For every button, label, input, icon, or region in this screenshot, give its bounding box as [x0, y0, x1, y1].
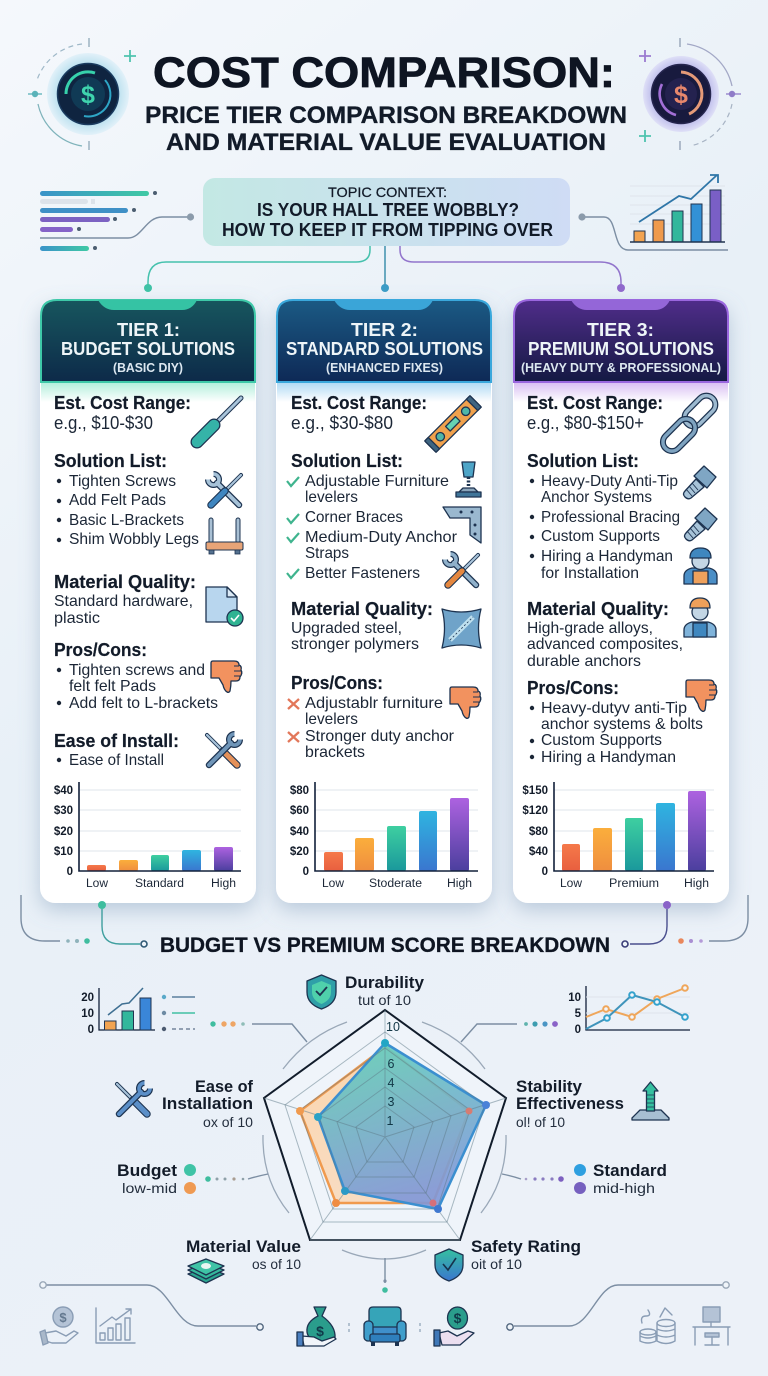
bar chart: tier 1 cost: $40	[54, 785, 73, 797]
pros and cons: Pros/Cons:	[54, 640, 147, 660]
icon: safety shield	[435, 1249, 463, 1281]
title: PRICE TIER COMPARISON BREAKDOWN	[145, 102, 627, 129]
solution list: Medium-Duty Anchor	[305, 529, 458, 546]
solution list: Better Fasteners	[305, 565, 420, 582]
icon: durability shield	[307, 975, 336, 1009]
mini bar chart with trend arrow	[578, 175, 728, 250]
legend: standard: mid-high	[593, 1180, 655, 1196]
line chart, top right: 0	[575, 1024, 581, 1036]
label: stability effectiveness: Effectiveness	[516, 1094, 624, 1113]
bar chart: tier 2 cost	[290, 782, 478, 890]
label: material value	[186, 1237, 301, 1272]
icon: corner brace	[443, 507, 481, 543]
icon: wrench and orange screwdriver	[207, 734, 240, 765]
est cost range: e.g., $80-$150+	[527, 413, 644, 433]
icon: tools	[117, 1083, 150, 1114]
pros and cons: levelers	[305, 711, 358, 728]
topic context box: IS YOUR HALL TREE WOBBLY?	[257, 199, 519, 220]
label: stability effectiveness	[516, 1077, 624, 1130]
tier 3 header: PREMIUM SOLUTIONS	[528, 338, 714, 359]
material quality: Material Quality:	[54, 572, 196, 592]
label: durability: tut of 10	[358, 992, 411, 1008]
bar chart: tier 2 cost: $20	[290, 846, 309, 858]
bar chart: tier 3 cost	[522, 782, 714, 890]
bar chart: tier 1 cost: 0	[67, 866, 73, 878]
material quality	[54, 572, 196, 627]
series: standard	[318, 1043, 486, 1209]
icon: money bag with hand: $	[316, 1323, 324, 1339]
icon: wrench and screwdriver	[445, 554, 478, 585]
pros and cons: Tighten screws and	[69, 662, 205, 679]
tier 1 header: BUDGET SOLUTIONS	[61, 338, 235, 359]
icon: left teal dollar medallion: $	[81, 81, 95, 109]
icon: right purple dollar medallion: $	[674, 81, 688, 109]
bar chart: tier 2 cost: Stoderate	[369, 878, 422, 890]
bar chart: tier 1 cost: High	[211, 878, 236, 890]
icon: bolt	[684, 508, 717, 541]
material quality: advanced composites,	[527, 636, 683, 653]
tier 3 header: (HEAVY DUTY & PROFESSIONAL)	[521, 361, 721, 375]
material quality: stronger polymers	[291, 636, 419, 653]
material quality: Upgraded steel,	[291, 620, 402, 637]
axis numbers: 10	[386, 1020, 400, 1034]
label: ease of installation: ox of 10	[203, 1114, 253, 1130]
solution list: Solution List:	[54, 451, 167, 471]
solution list: Corner Braces	[305, 509, 403, 526]
bar chart: tier 3 cost: Premium	[609, 878, 659, 890]
icon: screwdriver	[197, 398, 241, 442]
bar chart: tier 1 cost: $30	[54, 805, 73, 817]
solution list: Heavy-Duty Anti-Tip	[541, 473, 678, 490]
label: safety rating: oit of 10	[471, 1256, 522, 1272]
icon: hand with coin, gray: $	[59, 1310, 67, 1325]
axis numbers	[386, 1020, 400, 1128]
icon: hand with dollar coin: $	[454, 1310, 462, 1326]
label: durability: Durability	[345, 973, 425, 992]
icon: thumbs down	[450, 687, 481, 718]
solution list: Hiring a Handyman	[541, 548, 673, 565]
icon: worker with hard hat	[684, 598, 716, 637]
solution list: Basic L-Brackets	[69, 512, 184, 529]
line chart, top right	[568, 985, 690, 1036]
bar chart: tier 3 cost: $40	[529, 846, 548, 858]
icon: steel gusset plate	[442, 609, 481, 648]
tier 3 header	[514, 300, 728, 382]
solution list	[287, 451, 458, 582]
bar chart: tier 2 cost: High	[447, 878, 472, 890]
label: safety rating	[471, 1237, 581, 1272]
title	[145, 49, 627, 156]
est cost range: Est. Cost Range:	[527, 393, 663, 413]
legend: budget: low-mid	[122, 1180, 177, 1196]
icon: left teal dollar medallion	[28, 38, 136, 150]
title: COST COMPARISON:	[153, 49, 615, 97]
pros and cons: felt felt Pads	[69, 678, 156, 695]
icon: money bag with hand	[297, 1307, 336, 1346]
section heading: BUDGET VS PREMIUM SCORE BREAKDOWN	[160, 934, 610, 957]
bar chart: tier 3 cost: $80	[529, 826, 548, 838]
solution list: Custom Supports	[541, 528, 660, 545]
icon: document with check	[206, 587, 243, 626]
solution list: Tighten Screws	[69, 473, 176, 490]
icon: spirit level	[425, 396, 481, 452]
bar chart: tier 1 cost	[54, 782, 241, 890]
material quality: High-grade alloys,	[527, 620, 653, 637]
small bar and line chart, top left: 0	[88, 1024, 94, 1036]
pros and cons	[54, 640, 218, 712]
material quality	[527, 599, 683, 670]
bar chart: tier 1 cost: Standard	[135, 878, 184, 890]
bar chart: tier 3 cost: $150	[522, 785, 548, 797]
line chart, top right: 5	[575, 1008, 582, 1020]
bar chart: tier 2 cost: $40	[290, 826, 309, 838]
icon: L-brackets on shim	[206, 518, 243, 554]
horizontal bars decoration with connector	[40, 191, 194, 251]
icon: coin stacks and scribble, gray	[640, 1308, 675, 1344]
bottom connectors	[40, 1282, 729, 1330]
pros and cons: Hiring a Handyman	[541, 749, 676, 766]
bar chart: tier 3 cost: $120	[522, 805, 548, 817]
pros and cons: anchor systems & bolts	[541, 716, 703, 733]
bar chart: tier 3 cost: 0	[542, 866, 548, 878]
topic context box	[203, 178, 570, 246]
solution list: Anchor Systems	[541, 489, 652, 506]
axis numbers: 3	[388, 1095, 395, 1109]
tier 2 header	[277, 300, 491, 382]
callout arcs and dots around radar	[205, 1021, 564, 1293]
label: safety rating: Safety Rating	[471, 1237, 581, 1256]
icon: right purple dollar medallion	[639, 38, 741, 150]
icon: hand with coin, gray	[40, 1307, 78, 1345]
icon: bolt	[684, 466, 716, 499]
axis numbers: 1	[387, 1114, 394, 1128]
grid rings	[264, 1010, 506, 1240]
material quality: Standard hardware,	[54, 593, 193, 610]
icon: money stack	[188, 1259, 224, 1283]
pros and cons: Stronger duty anchor	[305, 728, 455, 745]
icon: armchair	[364, 1307, 406, 1346]
bar chart: tier 1 cost: Low	[86, 878, 109, 890]
icon: chain link	[659, 392, 719, 455]
material quality: Material Quality:	[527, 599, 669, 619]
pros and cons	[288, 673, 455, 761]
bar chart: tier 3 cost: Low	[560, 878, 583, 890]
tier 1 header: TIER 1:	[117, 319, 180, 340]
solution list: Add Felt Pads	[69, 492, 166, 509]
icon: thumbs down	[686, 680, 717, 711]
pros and cons: Pros/Cons:	[291, 673, 383, 693]
icon: furniture leveler	[456, 462, 481, 497]
pros and cons	[527, 678, 703, 766]
icon: growth chart, gray	[96, 1308, 135, 1343]
icon: crossed wrench and screwdriver	[208, 474, 241, 505]
tier 2 header: (ENHANCED FIXES)	[326, 361, 443, 375]
panel: tier 2 standard solutions	[276, 300, 492, 903]
label: ease of installation: Ease of	[195, 1077, 253, 1096]
material quality: durable anchors	[527, 653, 641, 670]
small bar and line chart, top left	[81, 988, 195, 1036]
series points	[296, 1039, 490, 1213]
bar chart: tier 1 cost: $20	[54, 826, 73, 838]
panel: tier 1 budget solutions	[40, 300, 256, 903]
solution list: Solution List:	[527, 451, 639, 471]
legend: standard	[574, 1161, 667, 1196]
pros and cons: Pros/Cons:	[527, 678, 619, 698]
tier 2 header: TIER 2:	[351, 319, 418, 340]
section connectors	[21, 895, 748, 947]
pros and cons: Add felt to L-brackets	[69, 695, 218, 712]
axis numbers: 4	[388, 1076, 395, 1090]
legend: standard: Standard	[593, 1161, 667, 1180]
label: ease of installation: Installation	[162, 1094, 253, 1113]
icon: stability arrow	[632, 1082, 669, 1120]
topic context box: TOPIC CONTEXT:	[328, 184, 447, 200]
ease of install: Ease of Install	[69, 752, 164, 769]
tier 2 header: STANDARD SOLUTIONS	[286, 338, 483, 359]
label: stability effectiveness: ol! of 10	[516, 1114, 565, 1130]
bar chart: tier 2 cost: $80	[290, 785, 309, 797]
label: material value: Material Value	[186, 1237, 301, 1256]
bar chart: tier 3 cost: High	[684, 878, 709, 890]
solution list	[54, 451, 199, 548]
est cost range: e.g., $30-$80	[291, 413, 393, 433]
legend: budget	[117, 1161, 196, 1196]
est cost range	[527, 393, 663, 433]
est cost range: Est. Cost Range:	[291, 393, 427, 413]
panel: tier 3 premium solutions	[513, 300, 729, 903]
solution list: Adjustable Furniture	[305, 473, 449, 490]
solution list: Solution List:	[291, 451, 403, 471]
icon: desk and chair, gray	[693, 1307, 730, 1345]
line chart, top right: 10	[568, 992, 581, 1004]
dashes between icons	[349, 1323, 420, 1333]
tier 1 header: (BASIC DIY)	[113, 361, 183, 375]
connectors to tiers	[144, 246, 625, 292]
pros and cons: Heavy-dutyv anti-Tip	[541, 700, 687, 717]
material quality: Material Quality:	[291, 599, 433, 619]
legend: budget: Budget	[117, 1161, 177, 1180]
est cost range	[54, 393, 191, 433]
solution list: Shim Wobbly Legs	[69, 531, 199, 548]
ease of install	[54, 731, 179, 769]
series: budget	[300, 1047, 469, 1203]
bar chart: tier 1 cost: $10	[54, 846, 73, 858]
radar chart	[264, 1010, 506, 1240]
small bar and line chart, top left: 20	[81, 992, 94, 1004]
title: AND MATERIAL VALUE EVALUATION	[166, 129, 606, 156]
bar chart: tier 2 cost: 0	[303, 866, 309, 878]
tier 1 header	[41, 300, 255, 382]
solution list	[527, 451, 680, 582]
icon: hand with dollar coin	[434, 1307, 474, 1346]
label: ease of installation	[162, 1077, 253, 1130]
icon: thumbs down	[211, 661, 242, 692]
ease of install: Ease of Install:	[54, 731, 179, 751]
material quality: plastic	[54, 610, 100, 627]
pros and cons: Adjustablr furniture	[305, 695, 443, 712]
topic context box: HOW TO KEEP IT FROM TIPPING OVER	[222, 219, 553, 240]
pros and cons: brackets	[305, 744, 365, 761]
est cost range: Est. Cost Range:	[54, 393, 191, 413]
bar chart: tier 2 cost: Low	[322, 878, 345, 890]
pros and cons: Custom Supports	[541, 732, 662, 749]
material quality	[291, 599, 433, 653]
solution list: Professional Bracing	[541, 509, 680, 526]
tier 3 header: TIER 3:	[587, 319, 654, 340]
solution list: levelers	[305, 489, 358, 506]
small bar and line chart, top left: 10	[81, 1008, 94, 1020]
axis numbers: 6	[388, 1057, 395, 1071]
est cost range	[291, 393, 427, 433]
label: material value: os of 10	[252, 1256, 301, 1272]
solution list: for Installation	[541, 565, 639, 582]
icon: handyman	[684, 548, 717, 584]
est cost range: e.g., $10-$30	[54, 413, 153, 433]
label: durability	[345, 973, 425, 1008]
solution list: Straps	[305, 545, 349, 562]
bar chart: tier 2 cost: $60	[290, 805, 309, 817]
label: stability effectiveness: Stability	[516, 1077, 583, 1096]
